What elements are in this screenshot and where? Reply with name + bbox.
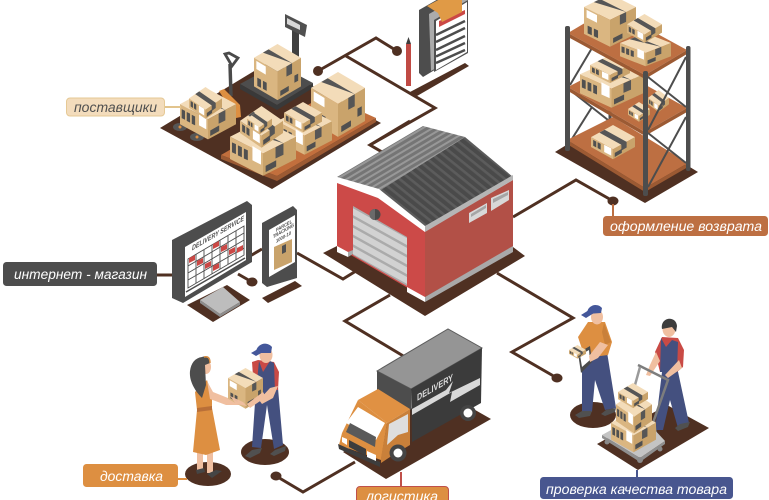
label: quality check (540, 477, 733, 499)
parcel on phone (274, 239, 292, 270)
storage rack with boxes (555, 0, 698, 203)
label: returns (603, 216, 768, 236)
label: suppliers: поставщики (74, 100, 158, 115)
supplier scene: pallets, scale and boxes (160, 14, 381, 189)
top shelf (568, 8, 687, 79)
monitor title: DELIVERY SERVICE (192, 214, 245, 252)
cardboard boxes (180, 44, 365, 176)
clipboard and pencil (406, 0, 469, 96)
security camera (370, 209, 380, 220)
customer figure (185, 356, 243, 486)
cab (338, 389, 410, 467)
label: online store: интернет - магазин (14, 267, 148, 282)
phone title: TRACKING (273, 223, 294, 240)
label stem: delivery (178, 478, 187, 480)
phone title: PARCEL (276, 219, 292, 234)
pallet jack (173, 53, 241, 141)
calendar (186, 226, 245, 292)
wheels (390, 405, 476, 462)
label: returns: оформление возврата (610, 219, 763, 234)
roller door (353, 206, 407, 286)
label stem: logistics (400, 472, 402, 487)
phone title: 1000-10 (276, 231, 291, 245)
cart worker scene (597, 319, 709, 470)
bottom shelf (567, 117, 688, 192)
label stem: returns (612, 204, 614, 217)
label: quality check: проверка качества товара (546, 482, 727, 497)
floor scale (240, 14, 313, 110)
warehouse (323, 126, 525, 316)
connector lines (157, 38, 618, 492)
label: delivery (83, 464, 178, 487)
windows (469, 190, 509, 223)
label: logistics (356, 486, 448, 500)
label: delivery: доставка (100, 469, 163, 484)
label stem: quality check (636, 470, 638, 478)
roof (337, 126, 513, 232)
middle shelf (568, 65, 687, 136)
worker (646, 319, 690, 431)
courier figure (241, 344, 289, 465)
truck lettering: DELIVERY (417, 373, 453, 404)
label stem: suppliers (165, 106, 181, 108)
hand truck (602, 365, 668, 463)
label: online store (3, 262, 157, 286)
phone title (273, 219, 294, 245)
parcel handed over (228, 368, 266, 409)
label: suppliers (66, 98, 164, 116)
lightning stripe (412, 378, 480, 415)
orange pallet (221, 95, 376, 181)
smartphone (262, 206, 302, 303)
inspector figure (569, 305, 616, 428)
monitor (172, 201, 252, 322)
delivery truck (338, 329, 491, 479)
